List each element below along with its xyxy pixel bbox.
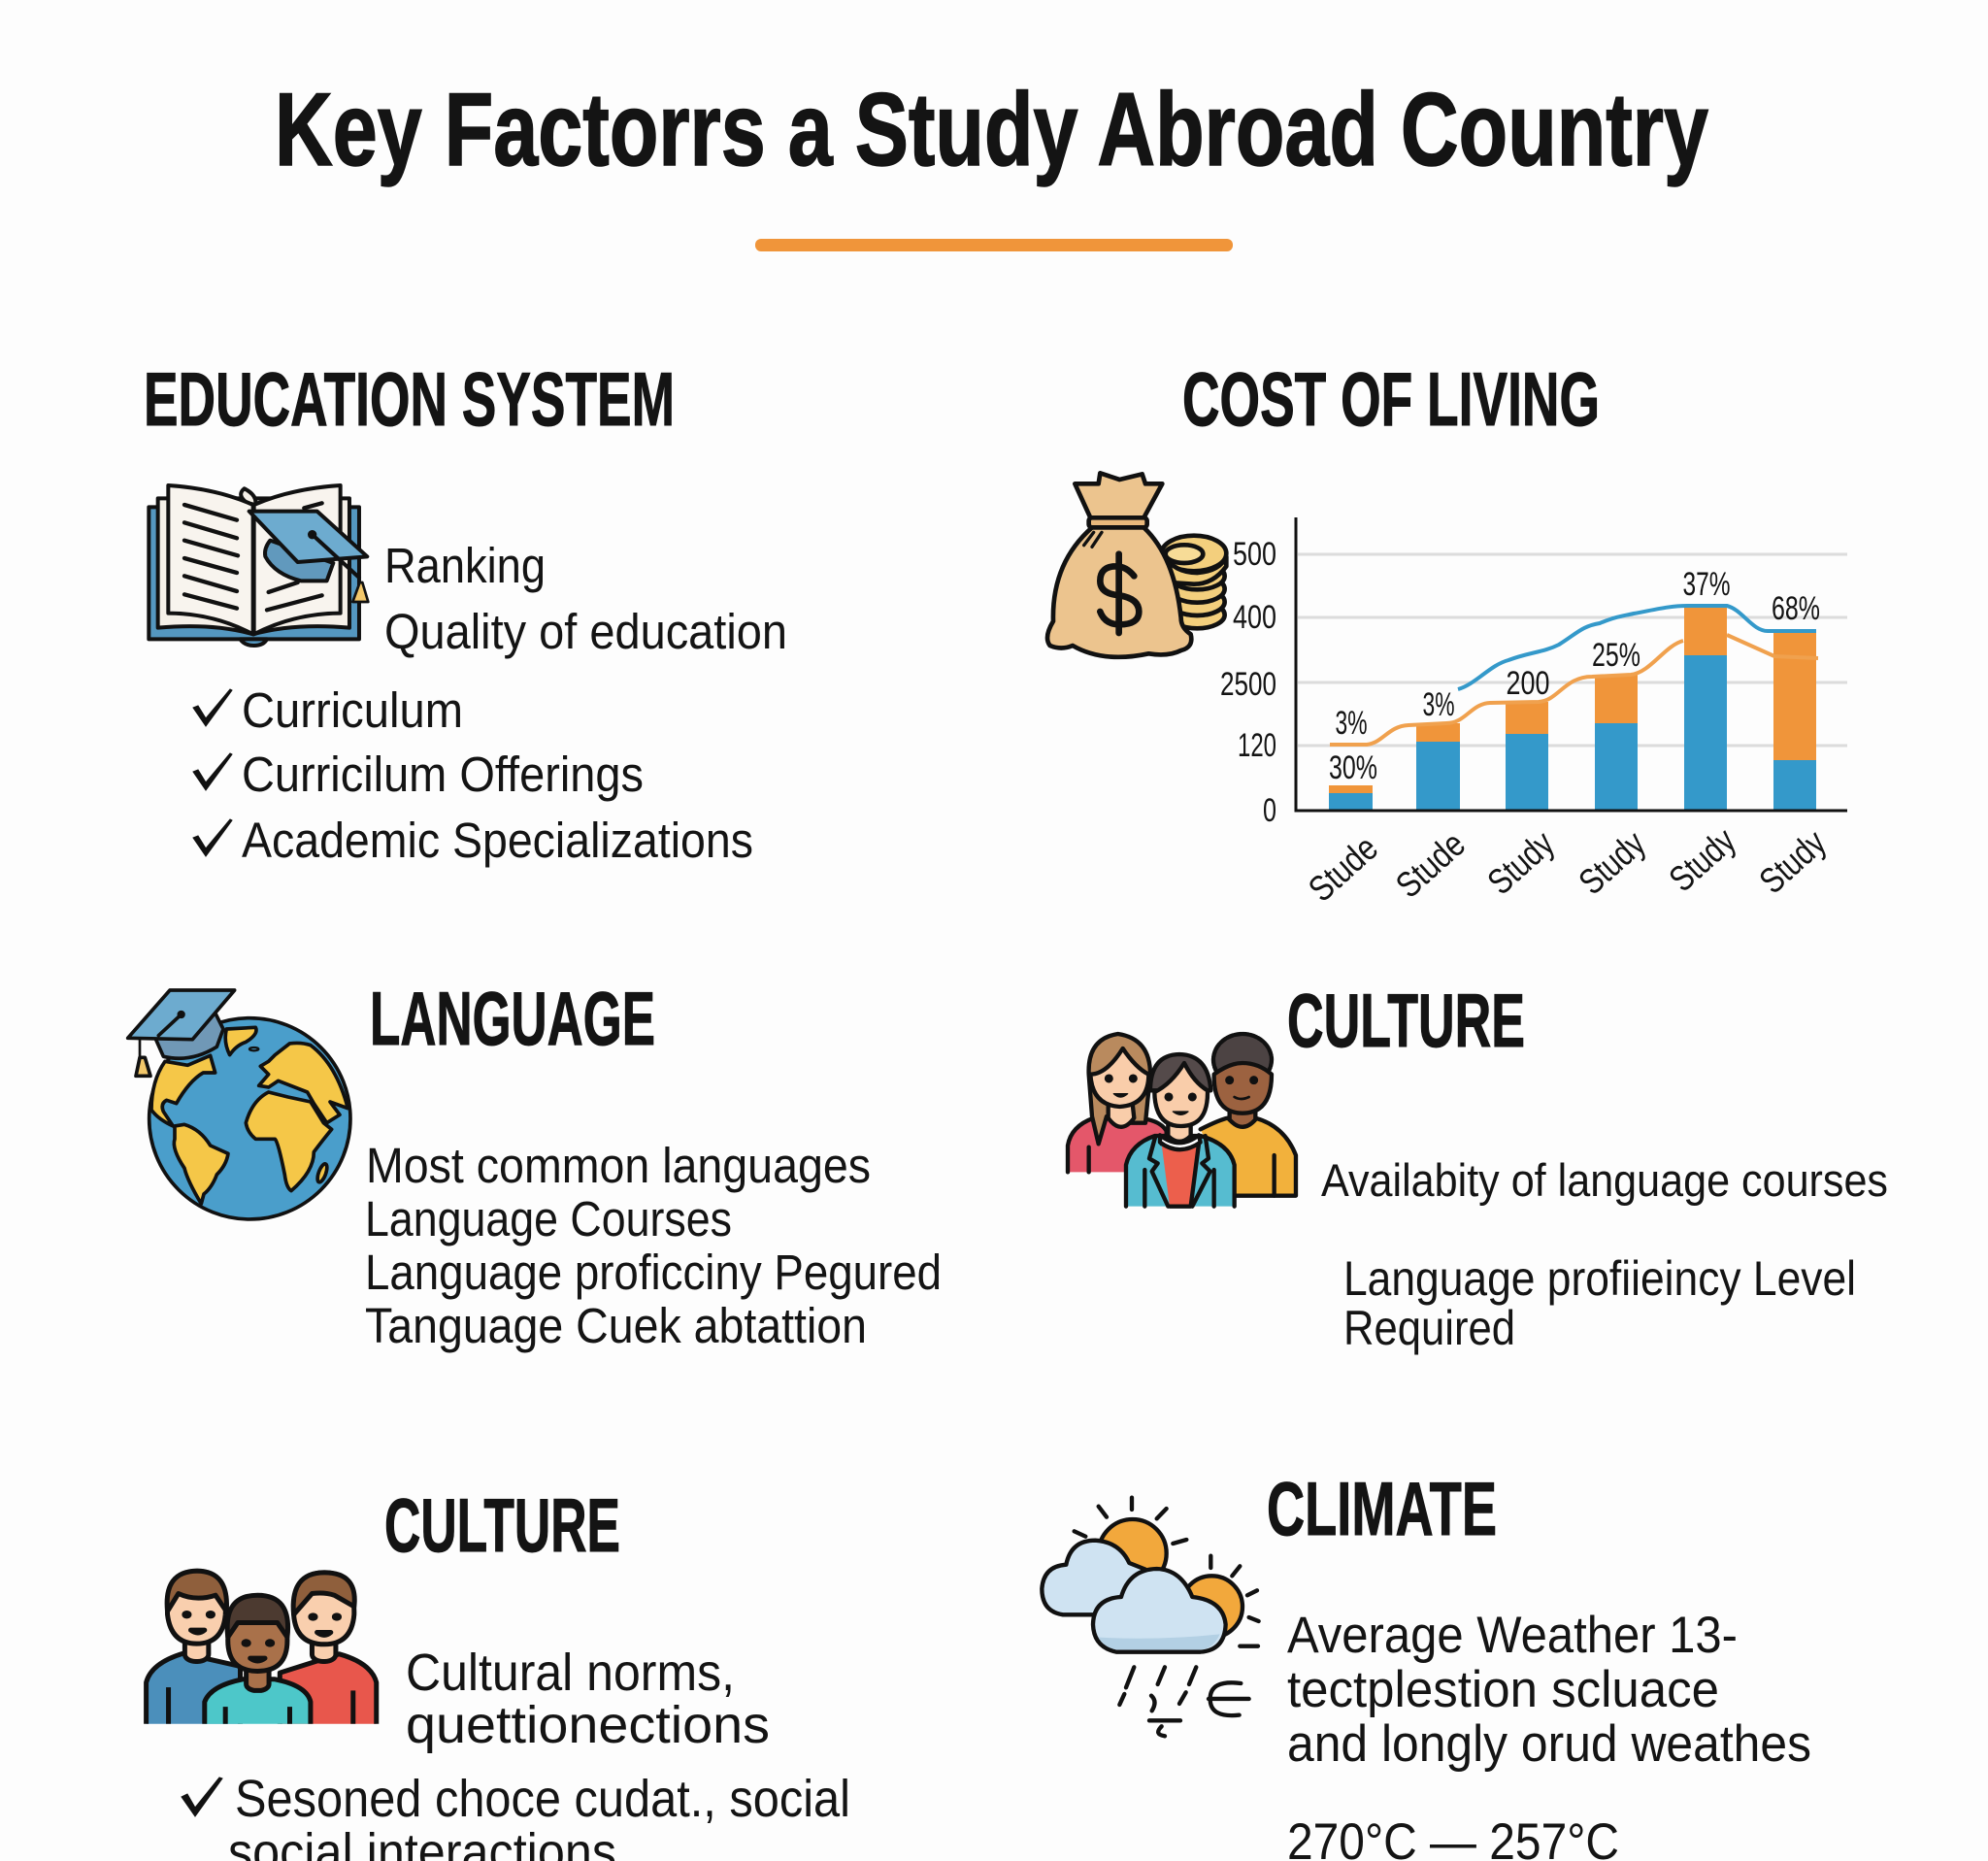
text: language proficiency: Required [1343, 1301, 1515, 1355]
text: average weather: tectplestion scluace [1287, 1661, 1719, 1718]
y axis labels: 0 [1263, 792, 1276, 829]
gridlines [1298, 554, 1847, 746]
icon: money bag with coins [1047, 473, 1226, 657]
text: average weather: and longly orud weathes [1287, 1715, 1811, 1773]
x axis labels: Study [1662, 820, 1743, 899]
heading: cost of living: COST OF LIVING [1182, 356, 1600, 442]
x axis labels [1301, 820, 1834, 910]
icon: open book with graduation cap [149, 485, 368, 646]
heading: education system: EDUCATION SYSTEM [144, 356, 675, 442]
value labels: 25% [1592, 637, 1640, 674]
icon: three people [1068, 1034, 1296, 1207]
orange line [1330, 635, 1818, 745]
text: language list: Language proficciny Pegured [365, 1245, 942, 1300]
value labels: 30% [1329, 749, 1377, 786]
icon: globe with graduation cap [128, 990, 350, 1219]
panel: climate [1042, 1466, 1811, 1861]
panel: cost of living [1047, 356, 1847, 910]
x axis labels: Study [1572, 823, 1653, 902]
y axis labels [1220, 536, 1276, 829]
check item: academic specializations: Academic Specializations [242, 813, 753, 868]
panel: culture left [147, 1482, 850, 1861]
heading: culture: CULTURE [384, 1482, 620, 1568]
value labels: 37% [1683, 566, 1730, 603]
icon: sun, clouds and rain [1042, 1498, 1259, 1736]
text: language proficiency: Language profiieincy Level [1343, 1251, 1856, 1306]
icon: three people [147, 1571, 377, 1724]
panel: education system [144, 356, 787, 868]
text: average weather: Average Weather 13- [1287, 1607, 1738, 1664]
check item: curriculum: Curriculum [242, 682, 463, 738]
y axis labels: 400 [1233, 599, 1276, 636]
heading: culture: CULTURE [1287, 978, 1525, 1063]
x axis labels: Stude [1388, 824, 1473, 906]
text: availability: Availabity of language courses [1321, 1154, 1888, 1206]
value labels: 3% [1336, 705, 1367, 742]
check item: seasoned choice [182, 1770, 850, 1861]
y axis labels: 500 [1233, 536, 1276, 573]
heading: language: LANGUAGE [370, 976, 655, 1061]
text: cultural norms: Cultural norms, [406, 1644, 735, 1702]
text: ranking: Ranking [384, 538, 546, 593]
x axis labels: Study [1752, 822, 1834, 901]
title underline [755, 239, 1233, 251]
panel: culture right [1068, 978, 1888, 1355]
value labels: 3% [1423, 686, 1454, 723]
y axis labels: 2500 [1220, 666, 1276, 703]
y axis labels: 120 [1238, 727, 1276, 764]
text: language list: Language Courses [365, 1191, 732, 1246]
text: language list: Tanguage Cuek abtattion [365, 1298, 867, 1353]
text: language proficiency [1343, 1251, 1856, 1355]
text: language list: Most common languages [366, 1138, 871, 1193]
panel: language [128, 976, 942, 1353]
text: language list [365, 1138, 942, 1353]
checklist: education [193, 682, 753, 868]
bars [1329, 607, 1816, 811]
value labels: 200 [1507, 665, 1549, 702]
axes [1296, 517, 1847, 811]
text: cultural norms: quettionections [406, 1696, 770, 1754]
text: average weather [1287, 1607, 1811, 1773]
heading: climate: CLIMATE [1267, 1466, 1497, 1551]
check item: seasoned choice: Sesoned choce cudat., social [235, 1770, 850, 1828]
check item: curriculum offerings: Curricilum Offerings [242, 747, 644, 802]
blue line [1458, 606, 1816, 689]
chart: stacked bars with lines [1220, 517, 1847, 910]
value labels: 68% [1772, 590, 1820, 627]
text: cultural norms [406, 1644, 770, 1754]
x axis labels: Stude [1301, 828, 1385, 910]
text: quality of education: Quality of education [384, 604, 787, 659]
x axis labels: Study [1480, 823, 1562, 902]
value labels [1329, 566, 1820, 786]
